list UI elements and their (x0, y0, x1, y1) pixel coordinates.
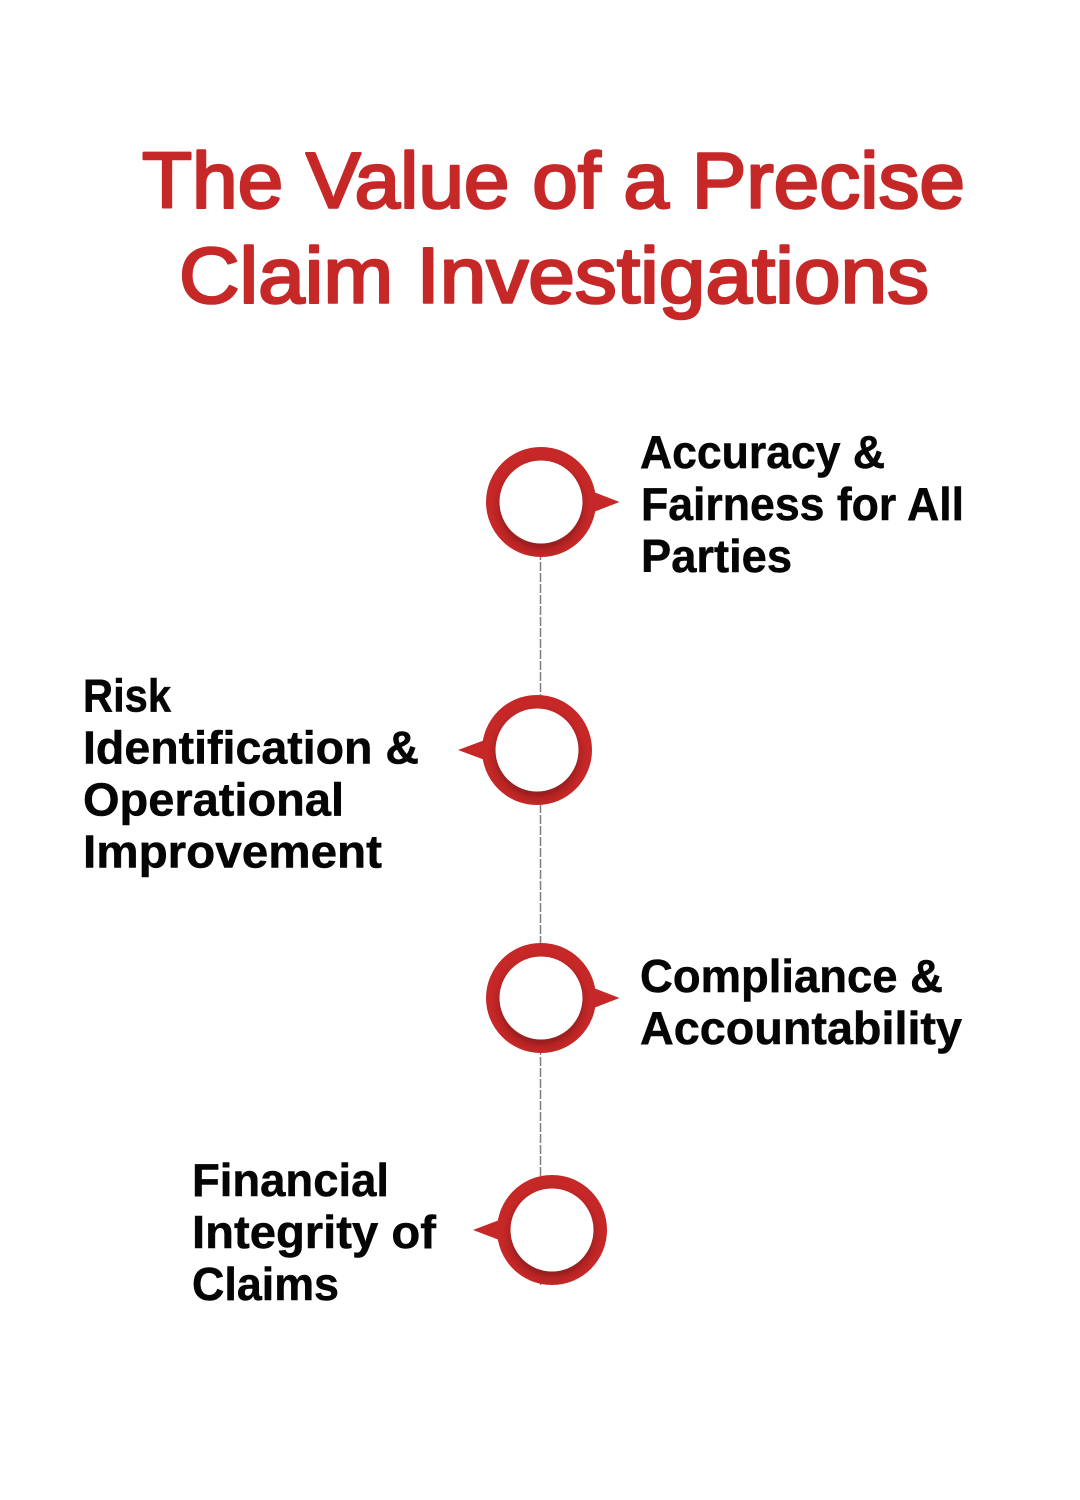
label: Accuracy & Fairness for All Parties: Parties (641, 530, 792, 582)
label: Accuracy & Fairness for All Parties: Accuracy & (640, 426, 885, 478)
label: Compliance & Accountability (640, 950, 962, 1054)
marker 2: ring pointing left (458, 695, 592, 805)
label: Financial Integrity of Claims: Financial (192, 1154, 389, 1206)
marker 3: ring pointing right (486, 943, 620, 1053)
label: Risk Identification & Operational Improvement (83, 670, 419, 878)
label: Risk Identification & Operational Improvement: Risk (83, 670, 171, 722)
label: Accuracy & Fairness for All Parties: Fairness for All (641, 478, 964, 530)
label: Risk Identification & Operational Improvement: Improvement (83, 826, 382, 878)
label: Accuracy & Fairness for All Parties (640, 426, 964, 582)
label: Financial Integrity of Claims: Claims (192, 1258, 339, 1310)
marker 4: ring pointing left (473, 1175, 607, 1285)
marker 1: ring pointing right (486, 447, 620, 557)
label: Compliance & Accountability: Accountability (640, 1002, 962, 1054)
label: Risk Identification & Operational Improvement: Operational (83, 774, 344, 826)
label: Financial Integrity of Claims (192, 1154, 437, 1310)
title: The Value of a Precise (142, 136, 965, 224)
title (142, 136, 965, 320)
title: Claim Investigations (179, 230, 929, 320)
label: Compliance & Accountability: Compliance & (640, 950, 943, 1002)
label: Financial Integrity of Claims: Integrity of (192, 1206, 437, 1258)
label: Risk Identification & Operational Improvement: Identification & (83, 722, 419, 774)
timeline connector line (540, 540, 542, 1285)
